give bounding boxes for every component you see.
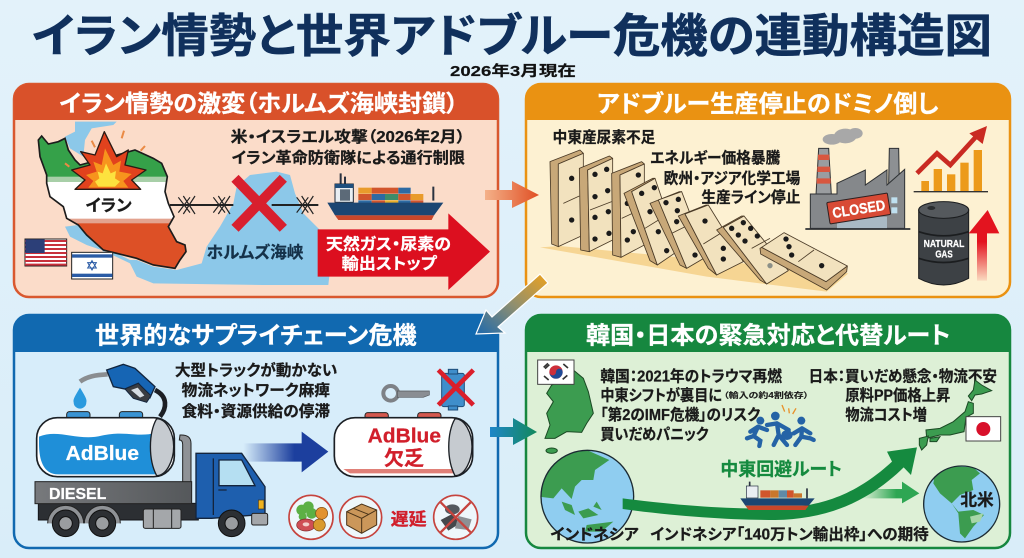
header band: Iran [14, 84, 498, 120]
panel: global supply chain crisis [14, 315, 498, 548]
icon: AdBlue shortage tank: AdBlue [368, 425, 441, 447]
flag: Japan [966, 417, 1001, 441]
icon: panic buying people [747, 405, 814, 446]
text: attack and transit restriction: 米・イスラエル攻撃（2026年2月） [231, 128, 465, 146]
icon: AdBlue tank: AdBlue [66, 442, 139, 465]
text: Japan situation: 日本：買いだめ懸念・物流不安 [809, 367, 997, 385]
icon: AdBlue shortage tank: 欠乏 [384, 446, 424, 470]
icon: diesel truck: DIESEL [49, 486, 107, 503]
text: domino causes: 中東産尿素不足 [553, 128, 655, 146]
globe: Indonesia [537, 450, 634, 543]
icon: diesel truck [35, 435, 268, 537]
chart: rising price bars [914, 126, 988, 192]
map: Iran with flag colours [38, 134, 187, 270]
barbed wire [170, 196, 318, 214]
text: Indonesia export quota: インドネシア「140万トン輸出枠」への期待 [650, 526, 929, 544]
text: logistics effects: 大型トラックが動かない [175, 362, 337, 380]
date label: 2026年3月現在 [450, 62, 576, 80]
dominoes [540, 150, 848, 292]
icon: AdBlue tank [37, 412, 174, 477]
text: Korea situation: 中東シフトが裏目に [600, 387, 722, 405]
header band: response [526, 315, 1010, 352]
text: logistics effects [175, 362, 337, 421]
map water: Hormuz strait [65, 122, 333, 285]
text: Korea situation: 韓国：2021年のトラウマ再燃 [600, 367, 783, 385]
text: Japan situation [809, 367, 997, 424]
text: Korea situation: 買いだめパニック [600, 427, 709, 444]
heading: supply chain: 世界的なサプライチェーン危機 [95, 323, 417, 350]
text: logistics effects: 物流ネットワーク麻痺 [182, 382, 330, 400]
arrow: route to North America [862, 482, 919, 503]
panel: Iran situation [14, 84, 498, 297]
icon: fuel nozzle [73, 364, 165, 417]
text: attack and transit restriction [231, 128, 465, 167]
panel: Korea and Japan response [526, 315, 1010, 548]
icon: natural gas barrel: NATURAL [924, 239, 964, 250]
icon: food [289, 495, 333, 539]
label: Hormuz strait: ホルムズ海峡 [207, 242, 304, 262]
globe: North America [924, 466, 1000, 542]
icon: container ship [327, 173, 443, 220]
icon: closed factory: CLOSED [831, 198, 887, 222]
icon: AdBlue shortage tank [334, 413, 473, 477]
label: North America: 北米 [960, 491, 994, 510]
text: attack and transit restriction: イラン革命防衛隊による通行制限 [231, 149, 465, 167]
icon: explosion [65, 131, 146, 189]
text: Korea situation: （輸入の約4割依存） [724, 390, 809, 400]
icon: ship on route [740, 482, 815, 510]
arrow: tank to shortage [243, 432, 328, 472]
icon: resources crossed [434, 495, 478, 539]
text: domino causes [553, 128, 800, 206]
icon: crossed AdBlue canister [438, 369, 473, 410]
flag: Korea [538, 360, 574, 384]
icon: natural gas barrel: GAS [935, 250, 953, 261]
flag: USA [25, 239, 67, 266]
icon: red cross blocking strait [235, 178, 283, 228]
text: domino causes: エネルギー価格暴騰 [650, 149, 781, 167]
arrow: Middle East bypass route [623, 447, 917, 520]
label: delay: 遅延 [391, 509, 427, 529]
flag: Israel [72, 252, 113, 279]
label: Iran: イラン [86, 196, 132, 215]
label: Indonesia on globe: インドネシア [550, 526, 639, 543]
text: Korea situation: 「第2のIMF危機」のリスク [600, 406, 760, 424]
icon: closed factory [805, 128, 910, 229]
icon: natural gas barrel [919, 202, 969, 285]
panel: AdBlue production halt [526, 84, 1010, 297]
label: bypass route: 中東回避ルート [720, 460, 842, 480]
arrow: panel 1 to panel 2 [485, 181, 539, 208]
map: Japan [919, 380, 992, 450]
text: domino causes: 欧州・アジア化学工場 [664, 170, 800, 188]
arrow: export stop: 輸出ストップ [342, 255, 437, 273]
arrow: export stop: 天然ガス・尿素の [326, 234, 451, 253]
icon: key [383, 386, 429, 401]
header band: supply chain [14, 315, 498, 352]
text: Japan situation: 物流コスト増 [845, 406, 927, 424]
title: イラン情勢と世界アドブルー危機の連動構造図 [32, 10, 992, 62]
text: Japan situation: 原料PP価格上昇 [845, 387, 950, 405]
arrow: panel 3 to panel 4 [490, 418, 537, 445]
heading: response: 韓国・日本の緊急対応と代替ルート [586, 323, 950, 350]
arrow: panel 2 to panel 3 [476, 274, 548, 334]
icon: parcel [340, 496, 382, 538]
heading: Iran: イラン情勢の激変（ホルムズ海峡封鎖） [59, 90, 458, 117]
heading: domino: アドブルー生産停止のドミノ倒し [597, 90, 939, 118]
map: Korea [545, 370, 593, 453]
text: Korea situation [600, 367, 809, 444]
text: logistics effects: 食料・資源供給の停滞 [182, 403, 330, 421]
header band: AdBlue halt [526, 84, 1010, 120]
arrow: export stop [318, 213, 490, 290]
arrow: price up [969, 210, 999, 281]
text: domino causes: 生産ライン停止 [701, 188, 800, 206]
